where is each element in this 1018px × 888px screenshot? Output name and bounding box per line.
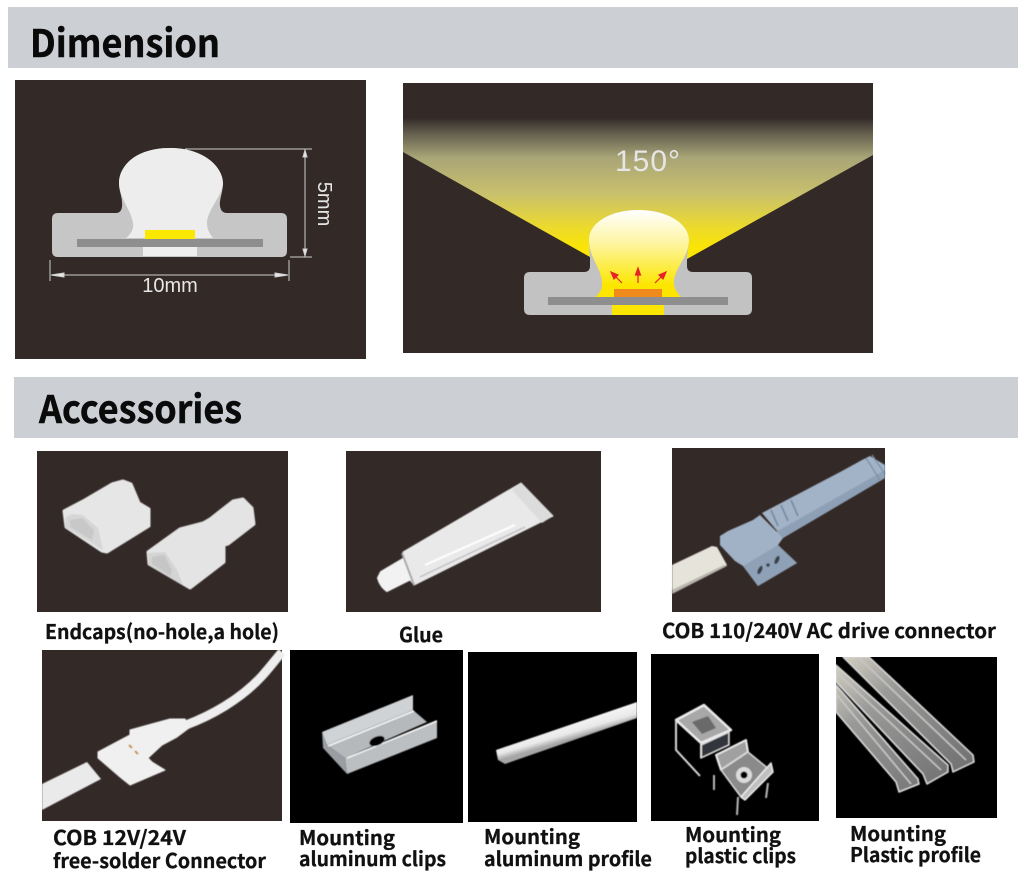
endcap without hole xyxy=(64,481,149,552)
white base window xyxy=(143,247,197,256)
glowing dome xyxy=(589,210,689,297)
grey circuit board xyxy=(548,297,728,305)
photo: AC drive connector xyxy=(672,448,885,612)
label: plastic clips: plastic clips xyxy=(685,840,796,869)
strip profile body xyxy=(52,148,287,257)
height dimension line xyxy=(185,149,312,257)
label: plastic profile: Mounting xyxy=(850,818,946,847)
photo: plastic profile xyxy=(836,657,997,818)
middle channel xyxy=(836,665,948,784)
photo: endcaps xyxy=(37,451,288,612)
header: Dimension xyxy=(8,7,1018,68)
endcap with hole xyxy=(148,499,254,588)
label: 150 degrees: 150° xyxy=(615,145,681,178)
panel: cross-section with 10mm x 5mm dimensions xyxy=(15,80,366,359)
label: plastic profile xyxy=(850,818,981,868)
contact holes xyxy=(756,555,781,575)
label: aluminum clips xyxy=(299,822,446,872)
red light arrows xyxy=(611,268,666,283)
label: glue: Glue xyxy=(399,619,443,648)
clear clip, upper xyxy=(676,705,731,776)
connector body xyxy=(762,456,885,538)
light beam xyxy=(403,118,873,259)
vent slots xyxy=(771,500,798,526)
photo: glue tube xyxy=(346,451,601,612)
label: plastic profile: Plastic profile xyxy=(850,839,981,868)
LED strip end xyxy=(42,762,101,810)
label: plastic clips xyxy=(685,819,796,869)
yellow base window xyxy=(612,305,664,315)
connector head xyxy=(98,719,189,785)
rear channel xyxy=(843,657,974,772)
LED strip end xyxy=(672,546,727,593)
label: 10mm: 10mm xyxy=(142,275,198,297)
photo: free-solder connector xyxy=(42,650,282,821)
connector head xyxy=(720,515,797,586)
header: Dimension: Dimension xyxy=(30,13,220,68)
header: Accessories: Accessories xyxy=(38,379,242,434)
label: aluminum profile: aluminum profile xyxy=(484,843,652,872)
cable xyxy=(186,652,282,725)
label: AC drive connector: COB 110/240V AC drive connector xyxy=(662,615,996,644)
orange LED chip xyxy=(614,289,662,297)
header: Accessories xyxy=(14,377,1018,438)
label: free-solder connector: COB 12V/24V xyxy=(53,822,187,851)
strip profile body xyxy=(524,210,752,315)
label: free-solder connector: free-solder Connector xyxy=(53,845,266,874)
front channel xyxy=(836,685,919,792)
label: aluminum profile: Mounting xyxy=(484,821,580,850)
width dimension line xyxy=(50,260,289,281)
copper pins xyxy=(129,745,138,754)
photo: plastic clips xyxy=(651,654,819,821)
label: aluminum profile xyxy=(484,821,652,872)
label: plastic clips: Mounting xyxy=(685,819,781,848)
clear clip, lower xyxy=(714,740,773,815)
white diffuser dome xyxy=(119,148,223,238)
label: aluminum clips: Mounting xyxy=(299,822,395,851)
label: aluminum clips: aluminum clips xyxy=(299,843,446,872)
label: endcaps: Endcaps(no-hole,a hole) xyxy=(45,616,279,645)
panel: 150 degree beam angle xyxy=(403,83,873,353)
grey circuit board xyxy=(77,239,263,247)
label: free-solder connector xyxy=(53,822,266,874)
photo: aluminum profile xyxy=(468,652,637,822)
yellow LED chip xyxy=(145,230,195,239)
photo: aluminum clips xyxy=(290,650,463,823)
label: 5mm: 5mm xyxy=(313,182,335,226)
